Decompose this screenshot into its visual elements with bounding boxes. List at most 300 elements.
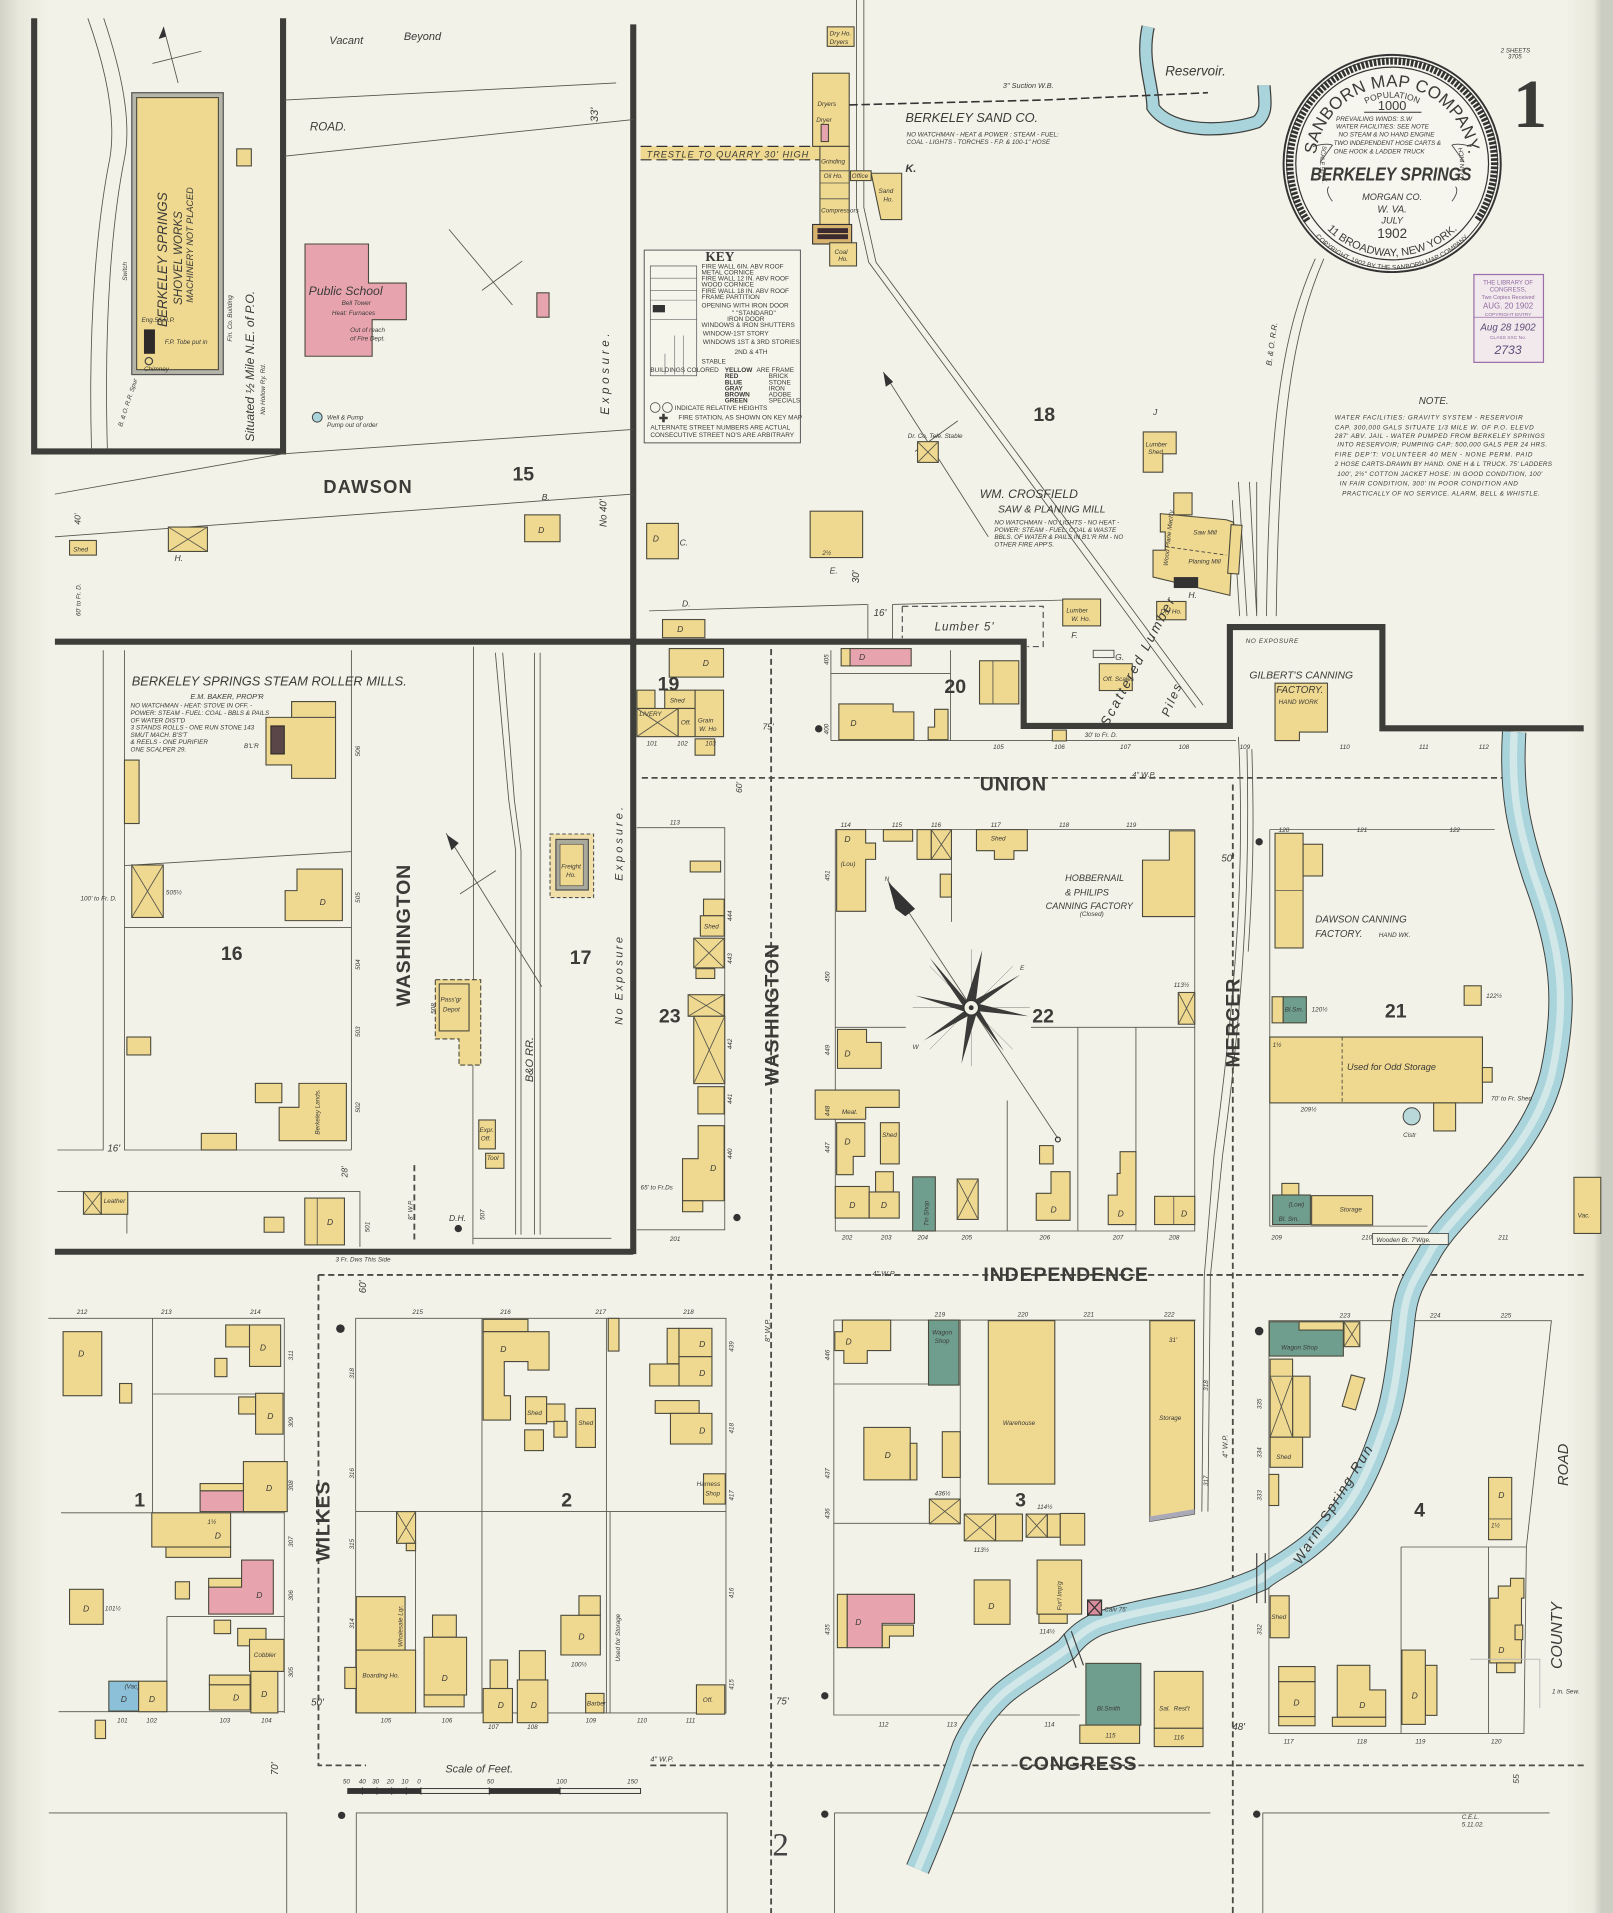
creek: Warm Spring Run — [918, 732, 1561, 1869]
panel: key legend: BROWN — [725, 392, 750, 399]
block 22 buildings and compass: & PHILIPS — [1065, 887, 1109, 897]
block 3 buildings: 437 — [825, 1468, 832, 1479]
scale of feet: Scale of Feet. — [445, 1764, 513, 1776]
block 16 and 17: Berkeley Springs Steam Roller Mills: 505 — [355, 892, 362, 903]
block 18: Wm. Crosfield saw and planing mill: Dr. Co. Tele. Stable — [908, 433, 963, 440]
block 22 buildings and compass: 202 — [841, 1235, 853, 1242]
block 1 buildings: D — [260, 1343, 266, 1353]
block 3 buildings: D — [846, 1336, 852, 1346]
Library of Congress stamp: Aug 28 1902 — [1479, 323, 1536, 334]
block 21 buildings: FACTORY. — [1315, 929, 1362, 940]
block 19 and block 20: 110 — [1340, 744, 1350, 751]
block 3 buildings: 116 — [1174, 1735, 1184, 1742]
street labels: 5.11.02. — [1462, 1821, 1484, 1828]
block 2 buildings: 111 — [686, 1718, 695, 1725]
block 23 buildings: 443 — [727, 953, 734, 964]
block 1 buildings: 1 — [134, 1490, 145, 1512]
block 19 and block 20: W. Ho — [699, 726, 717, 733]
block 1 buildings: 213 — [160, 1309, 172, 1316]
top-left labels: 33' — [589, 107, 601, 122]
block 3 buildings: Bl.Smith — [1097, 1705, 1121, 1712]
block: Public School — [305, 229, 549, 429]
block 3 buildings: 113 — [947, 1721, 957, 1728]
street labels: INDEPENDENCE — [983, 1264, 1149, 1286]
block 21 buildings: Used for Odd Storage — [1347, 1062, 1436, 1072]
block 16 and 17: Berkeley Springs Steam Roller Mills: BERKELEY SPRINGS STEAM ROLLER MILLS. — [132, 674, 407, 689]
map seal: Sanborn Map Company: POPULATION — [1364, 92, 1420, 104]
block 22 buildings and compass: Tin Shop — [924, 1200, 931, 1226]
block 16 and 17: Berkeley Springs Steam Roller Mills: Exposure. — [613, 804, 625, 881]
block 16 and 17: Berkeley Springs Steam Roller Mills: Pass'gr — [440, 997, 462, 1004]
map seal: Sanborn Map Company: PREVAILING WINDS: S.W — [1336, 116, 1413, 123]
Berkeley Sand Co. buildings: K. — [905, 163, 916, 175]
block: Public School: Out of reach — [350, 327, 385, 334]
Gilbert's Canning Factory: FACTORY. — [1276, 685, 1323, 696]
block 3 buildings: 435 — [825, 1624, 832, 1635]
block 16 and 17: Berkeley Springs Steam Roller Mills: 3 STANDS ROLLS - ONE RUN STONE 143 — [131, 725, 255, 732]
note: water facilities and fire department: INTO RESERVOIR; PUMPING CAP: 500,000 GALS PER 24 HRS. — [1337, 442, 1547, 449]
block: Shovel Works: F.P. Tobe put in — [165, 339, 208, 346]
panel: key legend: IRON — [769, 385, 785, 392]
block 21 buildings: Bl. Sm. — [1279, 1216, 1299, 1223]
panel: key legend: YELLOW — [725, 367, 753, 374]
panel: key legend: FIRE WALL 12 IN. ABV ROOF — [702, 276, 789, 283]
lumber yard buildings: Lumber — [1066, 607, 1089, 614]
heavy fire-limit boundary lines — [34, 18, 1584, 1254]
block 21 buildings: 121 — [1357, 827, 1367, 834]
block 4 buildings — [336, 1313, 1540, 1819]
map seal: Sanborn Map Company: JULY — [1380, 215, 1404, 225]
block 18: Wm. Crosfield saw and planing mill: Saw Mill — [1193, 529, 1217, 536]
scale of feet: 30 — [372, 1779, 380, 1786]
top-left labels: No 40' — [598, 498, 609, 527]
block 16 and 17: Berkeley Springs Steam Roller Mills: D — [320, 897, 326, 907]
block 16 and 17: Berkeley Springs Steam Roller Mills: B&O RR. — [524, 1037, 536, 1082]
block 4 buildings: 225 — [1500, 1313, 1512, 1320]
block 18: Wm. Crosfield saw and planing mill: SAW & PLANING MILL — [998, 504, 1106, 515]
block 2 buildings: D — [699, 1339, 705, 1349]
block 2 buildings: 416 — [728, 1587, 735, 1598]
Library of Congress stamp: AUG. 20 1902 — [1483, 302, 1533, 311]
block 2 buildings: Shed — [527, 1410, 542, 1417]
block 3 buildings — [821, 1311, 1210, 1747]
block 19 and block 20: 103 — [705, 740, 716, 747]
block 23 buildings: 201 — [669, 1236, 680, 1243]
block 19 and block 20: LIVERY — [639, 711, 662, 718]
block 3 buildings: 219 — [934, 1311, 946, 1318]
block 16 and 17: Berkeley Springs Steam Roller Mills: B'L'R — [244, 743, 259, 750]
panel: key legend: KEY — [705, 249, 735, 264]
lumber yard buildings: Off. Scales — [1103, 676, 1135, 683]
block 21 buildings: Bl.Sm. — [1285, 1006, 1303, 1013]
street labels: 50' — [311, 1698, 325, 1709]
reservoir: Reservoir. — [1165, 64, 1226, 79]
scale of feet — [343, 1764, 641, 1795]
map seal: Sanborn Map Company: MORGAN CO. — [1362, 192, 1422, 202]
block 16 and 17: Berkeley Springs Steam Roller Mills: Berkeley Lands. — [315, 1089, 322, 1135]
block 23 buildings: Shed — [704, 923, 719, 930]
block 22 buildings and compass: D — [881, 1200, 887, 1210]
block 18: Wm. Crosfield saw and planing mill: 18 — [1033, 404, 1055, 426]
top-left labels: 60' to Fr. D. — [76, 583, 83, 616]
note: water facilities and fire department: 287' ABV. JAIL - WATER PUMPED FROM BERKELEY SPRINGS — [1334, 433, 1545, 440]
block 2 buildings: 439 — [728, 1341, 735, 1352]
street labels: 48' — [1232, 1722, 1246, 1733]
block 19 and block 20: 19 — [658, 674, 679, 696]
block 21 buildings: 209½ — [1300, 1105, 1317, 1113]
block 22 buildings and compass: 450 — [825, 971, 832, 982]
street labels: 4" W.P. — [872, 1269, 896, 1278]
block: Shovel Works: Switch — [122, 261, 129, 281]
street labels: WILKES — [312, 1481, 334, 1562]
block 1 buildings: D — [256, 1590, 262, 1600]
block 2 buildings: 109 — [586, 1718, 597, 1725]
block 1 buildings: D — [267, 1411, 273, 1421]
block 18: Wm. Crosfield saw and planing mill: BBLS. OF WATER & PAILS IN B'L'R RM - NO — [994, 534, 1123, 541]
street labels: ROAD — [1556, 1443, 1572, 1486]
block 2 buildings: 318 — [349, 1368, 356, 1379]
street labels: 55 — [1511, 1774, 1521, 1784]
street labels: 4" W.P. — [1132, 770, 1156, 779]
lumber yard buildings: Scattered Lumber — [1097, 593, 1179, 729]
block 1 buildings: D — [78, 1349, 84, 1359]
sheet number: 2 SHEETS — [1500, 47, 1530, 54]
block 2 buildings: D — [498, 1700, 504, 1710]
note: water facilities and fire department: IN FAIR CONDITION, 300' IN POOR CONDITION AND — [1340, 481, 1518, 488]
block 19 and block 20: 107 — [1120, 744, 1131, 751]
block 3 buildings: 222 — [1163, 1311, 1175, 1318]
street labels: 4" W.P. — [1220, 1435, 1229, 1458]
block 3 buildings: 115 — [1105, 1732, 1116, 1739]
block 2 buildings: 108 — [527, 1724, 538, 1731]
panel: key legend: ADOBE — [769, 392, 792, 399]
panel: key legend: BUILDINGS COLORED — [650, 367, 719, 374]
panel: key legend: ARE FRAME — [756, 367, 795, 374]
street labels: 2 — [772, 1828, 789, 1864]
panel: key legend: ✚ — [659, 413, 668, 425]
block 2 buildings — [345, 1309, 735, 1731]
panel: key legend: FIRE WALL 18 IN. ABV ROOF — [702, 288, 789, 295]
block 4 buildings: Shed — [1276, 1454, 1292, 1461]
block 18: Wm. Crosfield saw and planing mill: Lumber — [1146, 442, 1168, 449]
block 18: Wm. Crosfield saw and planing mill: WM. CROSFIELD — [980, 487, 1078, 501]
block 16 and 17: Berkeley Springs Steam Roller Mills: 501 — [365, 1222, 372, 1232]
sheet number: 1 — [1513, 66, 1547, 142]
street labels: 75' — [776, 1696, 790, 1707]
dashed street limits — [318, 649, 1584, 1913]
block 18: Wm. Crosfield saw and planing mill: J — [1152, 407, 1158, 417]
block 21 buildings: 120 — [1279, 827, 1290, 834]
block 2 buildings: 105 — [381, 1718, 392, 1725]
block 19 and block 20: D — [677, 624, 683, 634]
block 16 and 17: Berkeley Springs Steam Roller Mills: OF WATER DIST'D — [131, 717, 186, 724]
block 16 and 17: Berkeley Springs Steam Roller Mills: 502 — [355, 1102, 362, 1113]
block 22 buildings and compass: 206 — [1039, 1235, 1051, 1242]
block 19 and block 20: Grain — [698, 717, 714, 724]
sheet number: 3705 — [1508, 54, 1522, 61]
block: Public School: of Fire Dept. — [350, 335, 385, 342]
panel: key legend — [644, 249, 802, 443]
Library of Congress stamp: COPYRIGHT ENTRY — [1485, 312, 1532, 318]
block 2 buildings: 314 — [349, 1618, 356, 1629]
block 18: Wm. Crosfield saw and planing mill: H. — [1188, 590, 1197, 600]
block 4 buildings: 117 — [1284, 1738, 1294, 1745]
block 3 buildings: 112 — [878, 1721, 889, 1728]
sheet number — [1500, 47, 1547, 142]
panel: key legend: FIRE STATION, AS SHOWN ON KEY MAP — [678, 415, 802, 422]
block 21 buildings: 120½ — [1312, 1005, 1328, 1013]
block 4 buildings: D — [1498, 1645, 1504, 1655]
block 18: Wm. Crosfield saw and planing mill: D — [653, 534, 659, 544]
top-left labels: Shed — [73, 546, 88, 553]
block 19 and block 20: 111 — [1419, 744, 1429, 751]
block 21 buildings: 211 — [1497, 1235, 1508, 1242]
map seal: Sanborn Map Company: SANBORN MAP COMPANY. — [1304, 74, 1480, 154]
panel: key legend: " "STANDARD" — [732, 310, 776, 317]
Berkeley Sand Co. buildings: Grinding — [821, 158, 846, 165]
block 22 buildings and compass: D — [844, 834, 850, 844]
street labels: 1 in. Sew. — [1552, 1688, 1579, 1695]
note: water facilities and fire department: WATER FACILITIES: GRAVITY SYSTEM - RESERVOIR — [1335, 415, 1523, 422]
block 2 buildings: 216 — [499, 1309, 511, 1316]
block 22 buildings and compass: 118 — [1059, 822, 1070, 829]
block 2 buildings: D — [578, 1632, 585, 1642]
block 18: Wm. Crosfield saw and planing mill: 30' — [851, 569, 862, 583]
top-left labels: B. — [542, 492, 550, 502]
block 19 and block 20: 108 — [1179, 744, 1190, 751]
street labels: C.E.L. — [1462, 1814, 1479, 1821]
Berkeley Sand Co. buildings — [641, 27, 1208, 266]
block 19 and block 20: 30' to Fr. D. — [1085, 732, 1117, 739]
block 22 buildings and compass: D — [1051, 1205, 1057, 1215]
block 16 and 17: Berkeley Springs Steam Roller Mills: Depot — [443, 1006, 460, 1013]
block 3 buildings: 3 — [1015, 1490, 1026, 1512]
lumber yard buildings: G. — [1115, 652, 1124, 662]
scale of feet: 0 — [417, 1779, 421, 1786]
block 1 buildings: D — [266, 1483, 272, 1493]
block 18: Wm. Crosfield saw and planing mill: Wood Plane Mach'y — [1163, 509, 1176, 566]
block 3 buildings: 436½ — [935, 1490, 951, 1498]
map seal: Sanborn Map Company: SCALE 50 FT. — [1320, 146, 1326, 184]
block 22 buildings and compass: HOBBERNAIL — [1065, 873, 1124, 883]
block 4 buildings: 334 — [1257, 1447, 1264, 1458]
block 4 buildings: D — [1293, 1698, 1300, 1708]
block 22 buildings and compass: 207 — [1112, 1235, 1124, 1242]
Berkeley Sand Co. buildings: Coal — [835, 249, 848, 256]
block 4 buildings: 224 — [1429, 1313, 1441, 1320]
note: water facilities and fire department: FIRE DEP'T: VOLUNTEER 40 MEN - NONE PERM. PAID — [1335, 451, 1533, 458]
block 4 buildings: D — [1359, 1700, 1365, 1710]
block 21 buildings: HAND WK. — [1379, 932, 1410, 939]
block 16 and 17: Berkeley Springs Steam Roller Mills: Tool — [487, 1155, 499, 1162]
block: Shovel Works: Eng.56 H.P. — [142, 317, 175, 324]
top-left labels: 15 — [512, 464, 534, 486]
block 16 and 17: Berkeley Springs Steam Roller Mills: 17 — [570, 947, 592, 969]
block 1 buildings: 103 — [220, 1718, 231, 1725]
block 16 and 17: Berkeley Springs Steam Roller Mills: 100' to Fr. D. — [81, 895, 117, 902]
map seal: Sanborn Map Company: 1000 — [1378, 98, 1406, 113]
block 16 and 17: Berkeley Springs Steam Roller Mills: 28' — [340, 1166, 350, 1178]
block 2 buildings: 316 — [349, 1468, 356, 1479]
block 18: Wm. Crosfield saw and planing mill: E. — [830, 565, 838, 575]
block 3 buildings: Fur'l Imp'g — [1057, 1581, 1064, 1610]
block 2 buildings: 2 — [561, 1490, 572, 1512]
block 22 buildings and compass: D — [1181, 1208, 1187, 1218]
top-left labels: Beyond — [404, 31, 442, 43]
panel: key legend: RED — [725, 373, 739, 380]
block 3 buildings: D — [885, 1450, 891, 1460]
block 21 buildings: 122½ — [1486, 992, 1503, 1000]
Berkeley Sand Co. buildings: Dryers — [830, 39, 849, 46]
scale of feet: 50 — [343, 1779, 350, 1786]
block 3 buildings: Shop — [935, 1338, 950, 1345]
block 23 buildings: 442 — [727, 1038, 734, 1049]
block: Public School: Bell Tower — [342, 300, 372, 307]
block 18: Wm. Crosfield saw and planing mill: Shed — [1148, 449, 1163, 456]
block 22 buildings and compass: 203 — [880, 1235, 892, 1242]
block 3 buildings: 221 — [1082, 1311, 1094, 1318]
block: Shovel Works: SHOVEL WORKS — [173, 211, 185, 305]
block: Shovel Works: Chimney — [144, 366, 170, 373]
block 22 buildings and compass: CANNING FACTORY — [1046, 901, 1134, 911]
block 3 buildings: 446 — [825, 1349, 832, 1360]
block 2 buildings: 100½ — [571, 1661, 588, 1669]
block 2 buildings: 415 — [728, 1679, 735, 1690]
block 21 buildings: Cistr — [1403, 1132, 1417, 1139]
block 1 buildings: 308 — [288, 1480, 295, 1491]
street labels: COUNTY — [1549, 1601, 1566, 1669]
block 3 buildings: Storage — [1159, 1415, 1182, 1422]
block 22 buildings and compass: 449 — [825, 1044, 832, 1055]
block 3 buildings: 114½ — [1040, 1628, 1056, 1636]
panel: key legend: STONE — [769, 379, 791, 386]
block 3 buildings: Warehouse — [1003, 1420, 1036, 1427]
block 4 buildings: 223 — [1339, 1313, 1351, 1320]
street labels: 50' — [1221, 853, 1235, 864]
block 2 buildings: Off. — [703, 1697, 713, 1704]
note: water facilities and fire department: PRACTICALLY OF NO SERVICE. ALARM, BELL & WHISTLE. — [1342, 490, 1540, 497]
panel: key legend: WINDOW-1ST STORY — [703, 331, 769, 338]
block 16 and 17: Berkeley Springs Steam Roller Mills: 16' — [107, 1144, 121, 1155]
block 1 buildings: (Vac) — [124, 1684, 139, 1691]
block 22 buildings and compass: E — [1020, 965, 1025, 972]
top-left labels: Vacant — [329, 35, 364, 47]
Berkeley Sand Co. buildings: Dryers — [817, 101, 837, 108]
block: Shovel Works — [117, 27, 267, 442]
block 2 buildings: D — [699, 1426, 705, 1436]
block 21 buildings: Vac. — [1578, 1213, 1590, 1220]
block 2 buildings: Shop — [705, 1491, 720, 1498]
lumber yard buildings: F. — [1071, 630, 1078, 640]
block 22 buildings and compass: (Closed) — [1080, 911, 1104, 918]
map seal: Sanborn Map Company: COPYRIGHT, 1902 BY THE SANBORN MAP COMPANY. — [1316, 234, 1468, 270]
block 19 and block 20: Off. — [681, 720, 691, 727]
block 19 and block 20: D — [703, 658, 709, 668]
block 23 buildings — [641, 722, 774, 1243]
street labels — [270, 770, 1579, 1864]
block 19 and block 20: Shed — [670, 698, 685, 705]
street labels: CONGRESS — [1019, 1753, 1137, 1775]
block 16 and 17: Berkeley Springs Steam Roller Mills: 8" W.P. — [407, 1200, 414, 1220]
block 16 and 17: Berkeley Springs Steam Roller Mills: 504 — [355, 959, 362, 970]
block 21 buildings: (Low) — [1288, 1202, 1304, 1209]
note: water facilities and fire department — [1264, 322, 1553, 497]
block 18: Wm. Crosfield saw and planing mill: POWER: STEAM - FUEL: COAL & WASTE — [994, 527, 1117, 534]
top-left labels — [70, 31, 612, 616]
block 23 buildings: D — [710, 1163, 716, 1173]
block 22 buildings and compass: 448 — [825, 1105, 832, 1116]
block 1 buildings: 102 — [146, 1718, 157, 1725]
lumber yard buildings: Lumber 5' — [935, 622, 995, 634]
block 16 and 17: Berkeley Springs Steam Roller Mills: Leather — [104, 1198, 126, 1205]
block 4 buildings: D — [1498, 1490, 1504, 1500]
block 23 buildings: 440 — [727, 1148, 734, 1159]
block 16 and 17: Berkeley Springs Steam Roller Mills: POWER: STEAM - FUEL: COAL - BBLS & PAILS — [131, 710, 270, 717]
block: Shovel Works: No Hollow Ry. Rd. — [260, 364, 267, 415]
block 2 buildings: D — [442, 1673, 448, 1683]
block 4 buildings: 119 — [1415, 1738, 1426, 1745]
street labels: 60' — [358, 1279, 369, 1293]
block 1 buildings: 212 — [76, 1309, 88, 1316]
panel: key legend: METAL CORNICE — [702, 270, 755, 277]
block 1 buildings: D — [121, 1694, 127, 1704]
note: water facilities and fire department: CAP. 300,000 GALS SITUATE 1/3 MILE W. OF P.O. ELEVD — [1335, 424, 1534, 431]
map seal: Sanborn Map Company: NO STEAM & NO HAND ENGINE — [1338, 132, 1435, 139]
top-left labels: D — [538, 525, 544, 535]
block 16 and 17: Berkeley Springs Steam Roller Mills: 503 — [355, 1026, 362, 1037]
block 2 buildings: Harness — [697, 1481, 721, 1488]
block 19 and block 20 — [637, 620, 1489, 755]
note: water facilities and fire department: B. & O. R.R. — [1264, 322, 1279, 366]
block: Shovel Works: BERKELEY SPRINGS — [155, 192, 170, 327]
block 16 and 17: Berkeley Springs Steam Roller Mills: No Exposure — [613, 935, 625, 1025]
block 23 buildings: 60' — [734, 782, 744, 793]
street labels: MERCER — [1223, 978, 1245, 1068]
panel: key legend: FIRE WALL 6IN. ABV ROOF — [702, 263, 784, 270]
note: water facilities and fire department: 100', 2½" COTTON JACKET HOSE: IN GOOD CONDITION, 100' — [1337, 470, 1543, 478]
panel: key legend: FRAME PARTITION — [702, 294, 760, 301]
block 4 buildings: 118 — [1357, 1738, 1367, 1745]
block 23 buildings: 23 — [659, 1005, 681, 1027]
block 21 buildings: 210 — [1361, 1235, 1373, 1242]
Berkeley Sand Co. buildings: Ho. — [838, 256, 848, 263]
Library of Congress stamp — [1474, 275, 1543, 362]
Library of Congress stamp: 2733 — [1494, 343, 1522, 357]
Berkeley Sand Co. buildings: Dry Ho. — [830, 30, 851, 37]
block 16 and 17: Berkeley Springs Steam Roller Mills — [81, 674, 625, 1264]
top-left labels: Exposure. — [600, 330, 612, 415]
block 18: Wm. Crosfield saw and planing mill: Dry Ho. — [1160, 609, 1182, 616]
block 2 buildings: 417 — [728, 1490, 735, 1501]
block 1 buildings: 101 — [117, 1718, 128, 1725]
lumber yard buildings — [682, 593, 1299, 729]
scale of feet: 40 — [359, 1779, 366, 1786]
map seal: Sanborn Map Company: WATER FACILITIES: SEE NOTE — [1336, 124, 1430, 131]
block 19 and block 20: 102 — [677, 740, 688, 747]
block 23 buildings: 75' — [763, 722, 774, 732]
panel: key legend: WINDOWS & IRON SHUTTERS — [702, 322, 795, 329]
lumber yard buildings: W. Ho. — [1071, 616, 1090, 623]
block: Public School: Heat: Furnaces — [332, 310, 376, 317]
block 21 buildings: DAWSON CANNING — [1315, 914, 1407, 925]
block 21 buildings: 21 — [1385, 1001, 1407, 1023]
Library of Congress stamp: Two Copies Received — [1482, 295, 1535, 301]
block 19 and block 20: 20 — [944, 676, 966, 698]
block 1 buildings: D — [233, 1693, 239, 1703]
reservoir — [1146, 27, 1265, 129]
block 22 buildings and compass: D — [844, 1049, 850, 1059]
block 16 and 17: Berkeley Springs Steam Roller Mills: Freight — [561, 864, 581, 871]
